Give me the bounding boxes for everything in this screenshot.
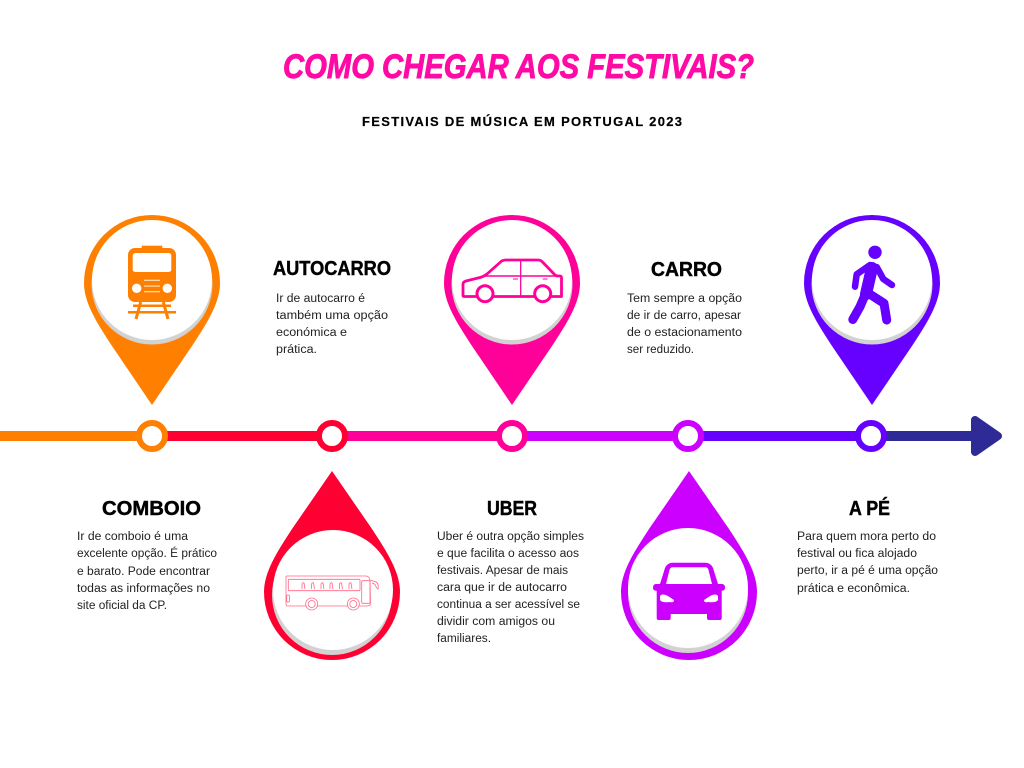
panel: carro — [621, 259, 757, 660]
heading: uber: UBER — [487, 498, 537, 520]
text: carro: de ir de carro, apesar — [627, 310, 741, 322]
text: uber: cara que ir de autocarro — [437, 582, 567, 594]
text: a pé: festival ou fica alojado — [797, 548, 917, 560]
subtitle: FESTIVAIS DE MÚSICA EM PORTUGAL 2023 — [362, 114, 682, 129]
text: carro — [627, 293, 742, 356]
text: uber: Uber é outra opção simples — [437, 531, 584, 543]
text: a pé — [797, 531, 938, 595]
text: carro: ser reduzido. — [627, 344, 694, 356]
text: autocarro: económica e — [276, 327, 347, 339]
icon: bus — [286, 576, 378, 610]
text: comboio: excelente opção. É prático — [77, 547, 217, 560]
text: carro: Tem sempre a opção — [627, 293, 742, 305]
text: autocarro: também uma opção — [276, 310, 388, 322]
marker: autocarro — [319, 423, 345, 449]
text: carro: de o estacionamento — [627, 327, 742, 339]
pin: autocarro — [264, 471, 400, 660]
panel: uber — [437, 215, 584, 645]
text: autocarro: prática. — [276, 344, 317, 356]
pin: a pé — [804, 215, 940, 405]
icon: walking person — [853, 246, 892, 320]
text: a pé: perto, ir a pé é uma opção — [797, 565, 938, 577]
text: comboio: todas as informações no — [77, 583, 210, 595]
panel: autocarro — [264, 258, 400, 660]
text: uber — [437, 531, 584, 645]
marker: uber — [499, 423, 525, 449]
pin: uber — [444, 215, 580, 405]
text: a pé: prática e econômica. — [797, 583, 910, 595]
icon: side car — [463, 260, 562, 302]
marker: carro — [675, 423, 701, 449]
marker: a pé — [858, 423, 884, 449]
text: autocarro: Ir de autocarro é — [276, 293, 365, 305]
panel: a pé — [797, 215, 940, 595]
heading: a pé: A PÉ — [849, 497, 890, 520]
text: uber: festivais. Apesar de mais — [437, 565, 568, 577]
icon: front car — [653, 563, 725, 620]
text: uber: familiares. — [437, 633, 491, 645]
title: COMO CHEGAR AOS FESTIVAIS? — [283, 48, 754, 86]
text: a pé: Para quem mora perto do — [797, 531, 936, 543]
panel: comboio — [77, 215, 220, 612]
pin: comboio — [84, 215, 220, 405]
text: autocarro — [276, 293, 388, 356]
text: comboio — [77, 531, 217, 612]
text: uber: dividir com amigos ou — [437, 616, 555, 628]
arrow head — [975, 420, 998, 452]
text: comboio: site oficial da CP. — [77, 600, 167, 612]
text: comboio: Ir de comboio é uma — [77, 531, 189, 543]
timeline with arrow — [0, 420, 998, 452]
icon: train — [128, 246, 176, 319]
heading: autocarro: AUTOCARRO — [273, 258, 391, 280]
heading: carro: CARRO — [651, 259, 722, 281]
marker: comboio — [139, 423, 165, 449]
text: uber: continua a ser acessível se — [437, 599, 580, 611]
pin: carro — [621, 471, 757, 660]
text: comboio: e barato. Pode encontrar — [77, 566, 210, 578]
heading: comboio: COMBOIO — [102, 498, 201, 520]
text: uber: e que facilita o acesso aos — [437, 548, 579, 560]
